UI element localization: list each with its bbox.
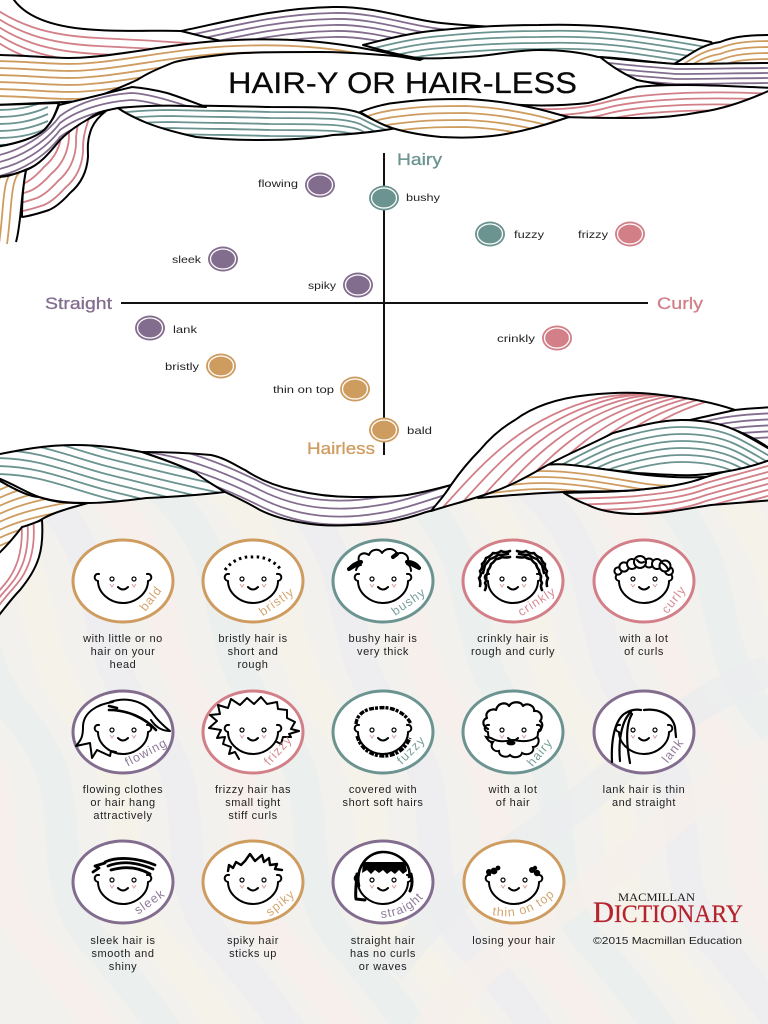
avatar: bushy	[333, 540, 433, 622]
point: bald: bald	[407, 425, 432, 437]
axis label: Straight: Straight	[45, 294, 112, 313]
avatar: bristly: bristly	[256, 585, 297, 619]
caption: curly: of curls	[624, 646, 664, 658]
caption: fuzzy: short soft hairs	[343, 797, 423, 809]
avatar: lank	[594, 691, 694, 773]
avatar: straight	[332, 840, 434, 924]
point: bristly: bristly	[165, 361, 200, 373]
caption: sleek: smooth and	[92, 948, 154, 960]
ribbon: purple top centre	[181, 7, 500, 61]
ribbon: tan far left	[0, 170, 26, 244]
caption: bristly: rough	[238, 659, 268, 671]
point: lank: lank	[173, 324, 198, 336]
avatar: fuzzy	[333, 691, 433, 773]
axis label: Curly: Curly	[657, 294, 704, 313]
panel: hair type glossary	[72, 538, 696, 973]
avatar: sleek	[73, 841, 173, 923]
point: thin on top	[273, 376, 370, 402]
ribbon: pink right	[516, 84, 768, 119]
hair ribbons: top cluster	[0, 0, 768, 244]
point: bristly	[165, 354, 236, 378]
caption: frizzy: small tight	[225, 797, 281, 809]
avatar: bald	[73, 540, 173, 622]
point: flowing	[258, 172, 335, 198]
caption: hairy: of hair	[496, 797, 530, 809]
point: sleek	[172, 246, 238, 272]
logo: Macmillan Dictionary: D	[593, 896, 614, 929]
point: bald	[369, 418, 432, 442]
ribbon: teal lower	[118, 104, 394, 141]
avatar: curly: curly	[659, 583, 689, 616]
ribbon: purple lower left	[0, 87, 206, 184]
ribbon: teal far left	[0, 100, 59, 147]
avatar: bristly	[203, 540, 303, 622]
caption: bald: with little or no	[82, 633, 163, 645]
caption: bushy: very thick	[357, 646, 409, 658]
caption: flowing: flowing clothes	[83, 784, 163, 796]
ribbon: pink left	[0, 518, 42, 620]
avatar: frizzy	[203, 691, 303, 773]
point: fuzzy: fuzzy	[514, 229, 545, 241]
avatar: flowing: flowing	[123, 736, 170, 769]
axis label: Hairless: Hairless	[307, 439, 375, 458]
caption: crinkly: rough and curly	[471, 646, 555, 658]
avatar: curly	[594, 540, 694, 622]
caption: bristly: bristly hair is	[218, 633, 288, 645]
axes	[121, 153, 648, 455]
caption: bald: head	[110, 659, 136, 671]
ribbon: tan lower	[359, 98, 570, 139]
avatar: fuzzy: fuzzy	[394, 733, 428, 767]
caption: frizzy: frizzy hair has	[215, 784, 291, 796]
point: thin on top: thin on top	[273, 384, 334, 396]
point: lank	[135, 316, 198, 340]
ribbon: purple far right	[704, 406, 768, 447]
caption: bristly: short and	[228, 646, 278, 658]
caption: straight: straight hair	[351, 935, 415, 947]
ribbon: teal top	[362, 24, 713, 63]
logo: Macmillan Dictionary	[593, 890, 743, 929]
axis label: Hairy: Hairy	[397, 150, 443, 169]
point: crinkly	[497, 326, 572, 350]
avatar: hairy: hairy	[524, 736, 556, 769]
caption: frizzy: stiff curls	[228, 810, 278, 822]
avatar: thin on top	[462, 840, 566, 924]
logo: Macmillan Dictionary: ICTIONARY	[614, 901, 743, 928]
point: flowing: flowing	[258, 178, 298, 190]
avatar: spiky: spiky	[263, 887, 298, 919]
caption: straight: or waves	[359, 961, 407, 973]
point: sleek: sleek	[172, 254, 202, 266]
ribbon: tan main	[0, 39, 417, 105]
avatar: bald: bald	[137, 583, 165, 614]
point: bushy: bushy	[406, 192, 441, 204]
caption: flowing: attractively	[93, 810, 153, 822]
title: HAIR-Y OR HAIR-LESS	[228, 67, 577, 100]
pastel patterned background	[0, 480, 768, 1024]
ribbon: tan right	[477, 463, 707, 499]
point: frizzy: frizzy	[578, 229, 609, 241]
ribbon: pink lower right	[563, 465, 768, 515]
ribbon: tan left	[0, 480, 88, 550]
caption: bushy: bushy hair is	[349, 633, 417, 645]
ribbon: pink left	[21, 112, 107, 218]
avatar: thin on top: thin on top	[493, 892, 554, 916]
ribbon: teal left	[0, 444, 225, 504]
point: frizzy	[578, 222, 645, 246]
caption: lank: lank hair is thin	[603, 784, 685, 796]
avatar: lank: lank	[659, 736, 687, 765]
avatar: spiky	[203, 841, 303, 923]
ribbon: pink large rising	[430, 392, 736, 512]
ribbon: pink top left	[0, 0, 190, 57]
ribbon: teal right	[552, 420, 768, 476]
caption: sleek: sleek hair is	[90, 935, 156, 947]
avatar: hairy	[463, 691, 563, 773]
avatar: crinkly	[463, 540, 563, 622]
point: bushy	[369, 186, 441, 210]
caption: curly: with a lot	[619, 633, 668, 645]
caption: hairy: with a lot	[488, 784, 537, 796]
caption: spiky: sticks up	[229, 948, 277, 960]
chart: hair scatter plot	[45, 150, 704, 458]
avatar: frizzy: frizzy	[261, 733, 295, 768]
caption: fuzzy: covered with	[349, 784, 417, 796]
copyright: ©2015 Macmillan Education	[593, 935, 742, 947]
avatar: straight: straight	[381, 894, 423, 918]
ribbon: tan top right	[674, 34, 768, 63]
point: spiky	[308, 272, 373, 298]
caption: thin on top: losing your hair	[472, 935, 556, 947]
caption: bald: hair on your	[91, 646, 155, 658]
avatar: crinkly: crinkly	[515, 584, 558, 619]
avatar: flowing	[73, 691, 173, 773]
caption: straight: has no curls	[350, 948, 416, 960]
avatar: sleek: sleek	[132, 886, 168, 917]
ribbon: purple right	[600, 57, 768, 88]
caption: sleek: shiny	[109, 961, 137, 973]
ribbon: purple centre	[141, 451, 450, 526]
avatar: bushy: bushy	[389, 585, 428, 618]
hair ribbons: middle cluster	[0, 386, 768, 620]
caption: flowing: or hair hang	[90, 797, 156, 809]
caption: crinkly: crinkly hair is	[477, 633, 549, 645]
caption: spiky: spiky hair	[227, 935, 279, 947]
point: crinkly: crinkly	[497, 333, 536, 345]
logo: Macmillan Dictionary: MACMILLAN	[618, 890, 695, 904]
caption: lank: and straight	[612, 797, 676, 809]
point: spiky: spiky	[308, 280, 337, 292]
point: fuzzy	[475, 222, 545, 246]
